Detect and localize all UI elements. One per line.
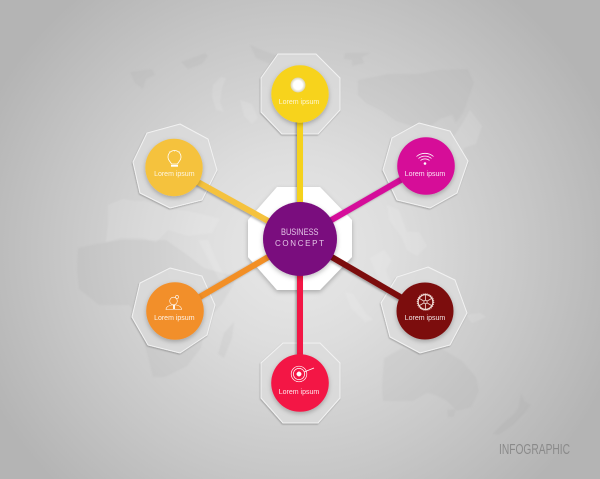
world map silhouette xyxy=(77,45,531,435)
hub subtitle: CONCEPT xyxy=(275,239,324,248)
glass octagon: top xyxy=(261,54,340,134)
icon: target xyxy=(291,366,314,382)
darker land masses xyxy=(77,45,531,435)
node: bottom red xyxy=(271,354,329,412)
glass octagon: lower left xyxy=(132,268,215,353)
connector: lower left xyxy=(198,256,270,298)
label: Lorem ipsum xyxy=(279,99,319,106)
node: upper left amber xyxy=(145,139,203,196)
icon: gear xyxy=(417,294,434,310)
icon: person xyxy=(166,295,182,310)
connector: upper right xyxy=(328,178,404,222)
icon: wifi xyxy=(416,153,434,165)
node: lower right dark red xyxy=(396,282,454,340)
icon: white dot xyxy=(290,78,306,92)
label: Lorem ipsum xyxy=(154,171,195,178)
connector: bottom xyxy=(297,270,303,360)
label: Lorem ipsum xyxy=(405,171,445,178)
glass octagon: lower right xyxy=(381,267,467,353)
glass octagon: upper right xyxy=(383,123,468,208)
connector: upper left xyxy=(196,181,270,222)
connector: lower right xyxy=(330,256,402,298)
label: Lorem ipsum xyxy=(279,389,319,396)
glass octagon: bottom xyxy=(261,343,340,423)
label: Lorem ipsum xyxy=(154,315,195,322)
connector: top xyxy=(297,115,303,210)
label: Lorem ipsum xyxy=(405,315,445,322)
hub title: BUSINESS xyxy=(281,227,318,237)
node: top yellow xyxy=(271,65,329,123)
central white octagon xyxy=(248,187,352,290)
glass octagon: upper left xyxy=(133,124,217,208)
center hub xyxy=(263,202,337,276)
node: upper right magenta xyxy=(397,137,455,195)
lighter land masses xyxy=(106,77,486,323)
icon: light bulb xyxy=(168,150,181,166)
node: lower left orange xyxy=(146,282,204,340)
